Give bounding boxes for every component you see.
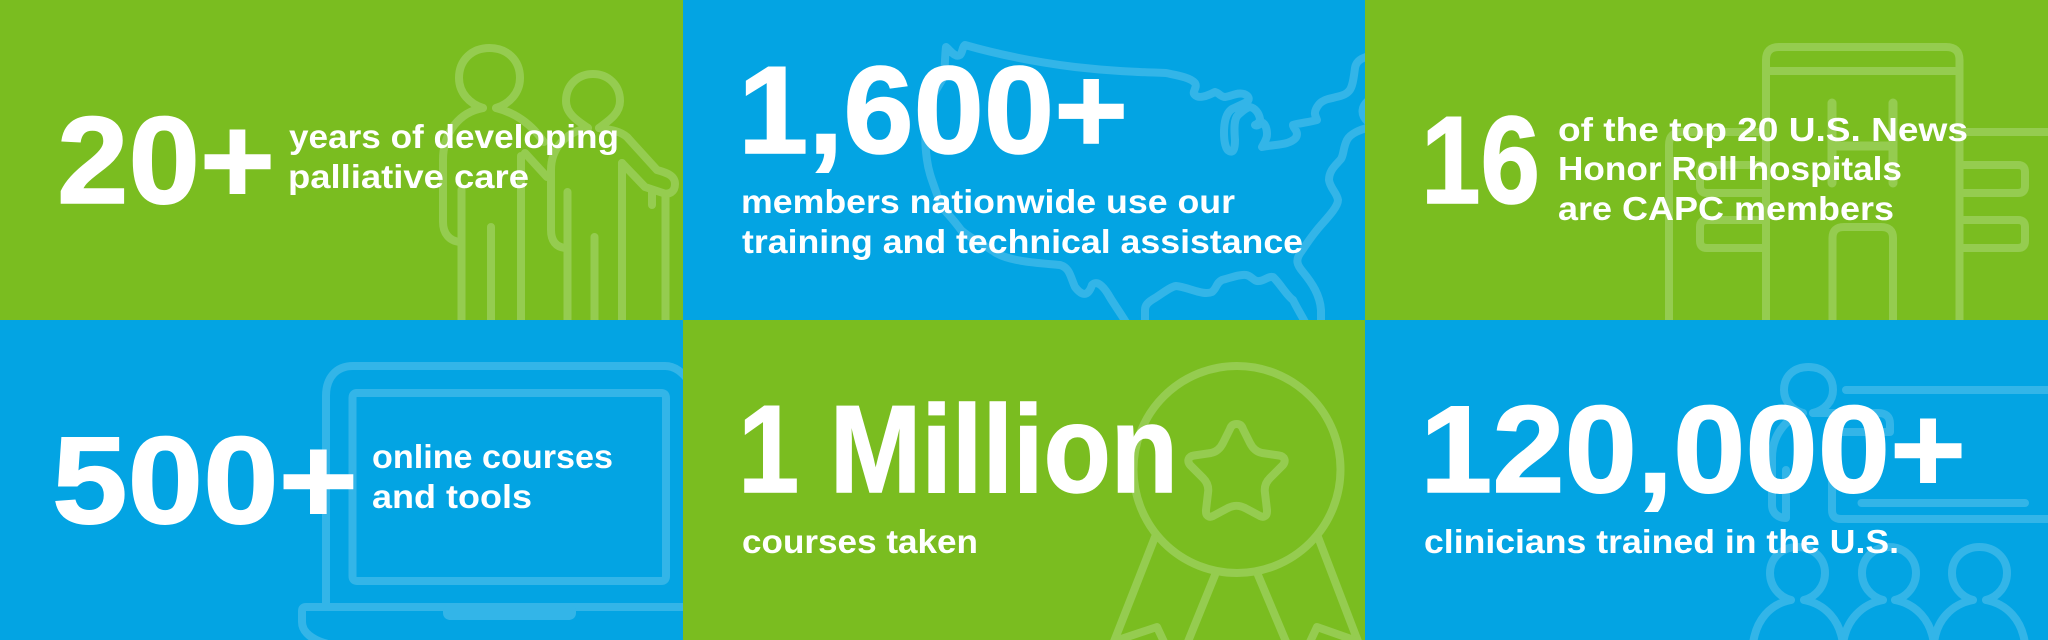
description: of the top 20 U.S. News Honor Roll hospitals are CAPC members: are CAPC members <box>1558 190 1894 227</box>
description: years of developing palliative care <box>288 118 619 195</box>
panel: 1 Million courses <box>743 362 1362 640</box>
icon: laptop <box>302 366 690 640</box>
description: years of developing palliative care: years of developing <box>289 118 619 155</box>
description: online courses and tools: online courses <box>372 438 613 475</box>
description: online courses and tools: and tools <box>372 478 532 515</box>
panel: 500+ courses <box>0 320 690 640</box>
description: of the top 20 U.S. News Honor Roll hospitals are CAPC members: Honor Roll hospitals <box>1558 150 1902 187</box>
icon: award ribbon with star <box>1113 366 1359 640</box>
panel: 1,600+ members <box>683 0 1372 324</box>
icon: hospital building <box>1669 47 2048 324</box>
stat number: 16: 16 <box>1421 92 1540 230</box>
icon: United States map outline <box>925 45 1372 324</box>
icon: two people, one with a cane <box>443 48 675 324</box>
stat number: 120,000+: 120,000+ <box>1420 381 1966 519</box>
description: courses taken: courses taken <box>742 523 978 560</box>
stat number: 1 Million: 1 Million <box>738 381 1178 519</box>
panel: 20+ years <box>60 44 679 320</box>
description: members nationwide use our training and technical assistance: members nationwide use our <box>741 183 1235 220</box>
description: members nationwide use our training and technical assistance <box>741 183 1303 260</box>
description: years of developing palliative care: palliative care <box>288 158 529 195</box>
description: members nationwide use our training and technical assistance: training and technical assistance <box>742 223 1303 260</box>
stat number: 1,600+: 1,600+ <box>738 42 1128 180</box>
description: online courses and tools <box>372 438 613 515</box>
description: of the top 20 U.S. News Honor Roll hospitals are CAPC members <box>1558 111 1968 227</box>
description: clinicians trained in the U.S.: clinicians trained in the U.S. <box>1424 523 1899 560</box>
stat number: 20+: 20+ <box>57 92 275 230</box>
panel: 16 hospitals <box>1427 43 2048 320</box>
stat number: 500+: 500+ <box>52 412 358 550</box>
icon: presenter with screen and audience <box>1753 367 2048 640</box>
description: of the top 20 U.S. News Honor Roll hospitals are CAPC members: of the top 20 U.S. News <box>1558 111 1968 148</box>
panel: 120,000+ clinicians <box>1365 320 2048 640</box>
